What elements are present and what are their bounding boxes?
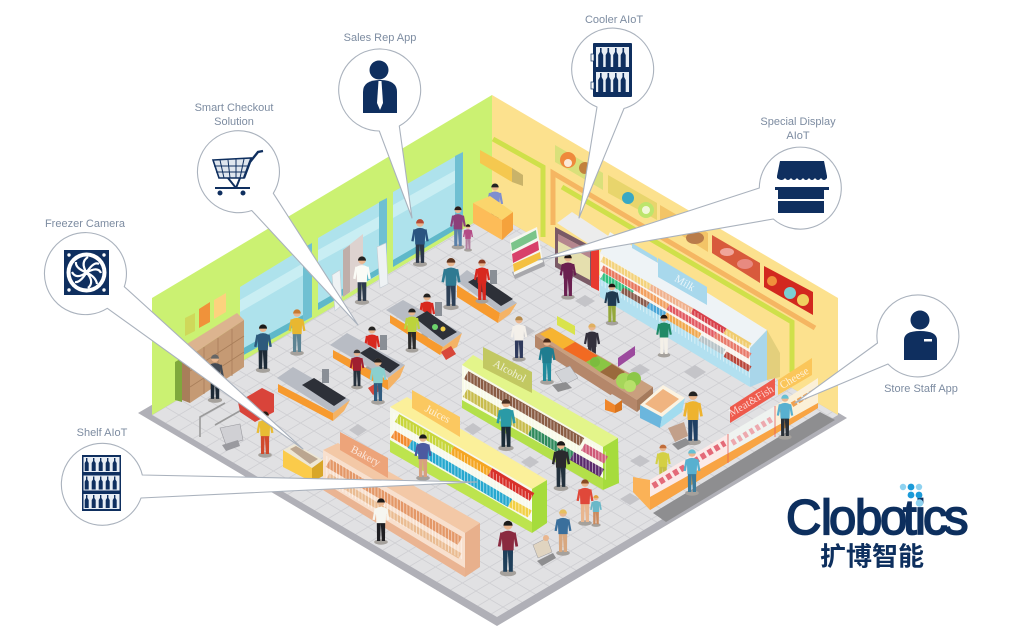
counter aisle shadow strip: [653, 412, 835, 522]
blue freezer: [640, 385, 685, 428]
left green wall: [152, 95, 492, 415]
yellow recess behind milk shelf: [767, 330, 780, 380]
logo chinese name: 扩博智能: [820, 542, 924, 572]
juices sign: Juices: [423, 403, 452, 426]
woman in purple: [451, 206, 465, 250]
child in pink: [464, 224, 472, 252]
sales rep: [412, 219, 428, 267]
woman at bakery: [374, 498, 388, 545]
customer in teal jacket: [443, 258, 459, 310]
shopper with olive trousers: [605, 284, 619, 325]
man at lockers: [207, 354, 223, 403]
scale stand: [605, 394, 622, 413]
entrance gates and baskets: [200, 388, 274, 437]
small cart: [668, 422, 690, 450]
label: Cooler AIoT: [585, 14, 643, 26]
cart with child: [533, 535, 556, 566]
shopper in maroon top: [351, 350, 363, 389]
bakery sign: Bakery: [349, 444, 383, 469]
wall picture: produce: [555, 145, 603, 190]
bubble: [61, 443, 477, 525]
wall picture: drinks: [608, 175, 657, 220]
wall posters: [185, 293, 226, 336]
callout: shelf AIoT: [61, 427, 477, 525]
juices sign: [412, 390, 460, 437]
woman in purple with basket: [416, 434, 430, 481]
label: Sales Rep App: [344, 32, 416, 44]
wall picture: meat: [712, 235, 760, 283]
woman in red dress: [578, 479, 592, 526]
woman in blue dress: [540, 338, 554, 385]
man in white tee: [354, 256, 370, 305]
label: Store Staff App: [884, 383, 958, 395]
checkout counter near: [330, 333, 405, 390]
milk shelf: [600, 232, 767, 387]
security gates: [332, 243, 388, 311]
alcohol sign: [483, 347, 532, 393]
lockers: [175, 313, 244, 403]
store scene: [138, 95, 847, 626]
produce stand: [535, 327, 653, 412]
window left: [240, 243, 312, 357]
floor base band: [138, 205, 847, 626]
meat and fish counter: [633, 378, 818, 510]
icon: cooler: [591, 43, 632, 97]
cashier centre: [420, 294, 434, 338]
window right: [393, 152, 463, 267]
icon: market stall: [775, 161, 829, 213]
callout: special display AIoT: [538, 116, 841, 260]
callout: freezer camera: [44, 218, 303, 449]
milk sign: Milk: [672, 273, 697, 294]
yellow freezer: [283, 444, 323, 482]
label: Shelf AIoT: [77, 427, 128, 439]
window with door: [318, 198, 387, 310]
woman in lime top: [405, 308, 419, 353]
woman at counter: [656, 445, 670, 486]
logo dots: [900, 484, 923, 507]
wall picture: family: [764, 266, 813, 315]
callout: cooler AIoT: [572, 14, 654, 218]
callout: store staff app: [795, 295, 959, 403]
wall decor stripes: [493, 139, 815, 372]
label: AIoT: [786, 130, 810, 142]
shopper in vest: [371, 358, 385, 405]
logo wordmark: Clobotics: [786, 491, 968, 545]
bubble: [197, 131, 358, 325]
info sign: [480, 150, 523, 186]
woman with red bag: [258, 411, 272, 458]
cashier near: [365, 326, 379, 371]
man in maroon jacket: [499, 521, 517, 576]
cooler fridge: [555, 212, 610, 291]
woman at fruit stand: [585, 324, 599, 368]
bakery sign: [340, 432, 388, 478]
checkout counter centre: [386, 300, 462, 355]
tiled floor: [152, 212, 838, 617]
icon: sales rep: [363, 60, 397, 113]
bakery shelf: [323, 443, 480, 577]
icon: shelf: [82, 455, 121, 511]
label: Smart Checkout: [195, 102, 273, 114]
blonde woman: [556, 509, 570, 556]
child in blue: [591, 495, 601, 527]
woman at cooler: [561, 254, 575, 300]
woman in yellow: [290, 309, 304, 356]
butcher staff: [685, 449, 699, 496]
label: Special Display: [760, 116, 836, 128]
vegetable sign: [618, 346, 635, 367]
checkout counter left: [277, 367, 350, 421]
man in teal: [498, 399, 514, 451]
label: Freezer Camera: [45, 218, 126, 230]
wall picture: bread: [660, 205, 708, 252]
milk sign: [658, 258, 707, 305]
bubble: [339, 49, 421, 218]
fruit sign: [557, 316, 575, 335]
icon: shopping cart: [213, 151, 263, 195]
shopping basket: [441, 346, 456, 360]
icon: store staff: [904, 310, 937, 360]
label: Solution: [214, 116, 254, 128]
man in navy: [255, 324, 271, 373]
woman in white with basket: [512, 316, 526, 362]
alcohol sign: Alcohol: [491, 358, 528, 385]
bubble: [538, 147, 841, 260]
floor dark tiles: [349, 295, 706, 505]
callout: smart checkout solution: [195, 102, 358, 325]
meat and fish sign: Meat&Fish: [727, 383, 776, 419]
customer service desk: [473, 196, 513, 240]
alcohol shelf: [462, 355, 619, 490]
checkout counter far right: [455, 270, 517, 323]
desk attendant: [488, 184, 502, 228]
man in black: [553, 441, 569, 491]
cheese staff: [778, 395, 792, 440]
icon: fan: [64, 250, 109, 295]
callout: sales rep app: [339, 32, 421, 218]
juices shelf: [390, 397, 547, 533]
magazine rack: [510, 227, 545, 279]
shopping cart parked: [220, 424, 243, 451]
man in yellow shirt: [684, 391, 702, 445]
cashier far right: [475, 260, 489, 304]
right yellow wall: [492, 95, 838, 415]
bubble: [572, 28, 654, 218]
woman in white trousers: [657, 315, 671, 358]
bubble: [44, 233, 303, 449]
cart by stand: [552, 366, 578, 392]
basket near counter: [368, 383, 381, 395]
cheese sign: Cheese: [778, 365, 811, 392]
logo: Clobotics: [786, 484, 968, 572]
bubble: [795, 295, 959, 403]
